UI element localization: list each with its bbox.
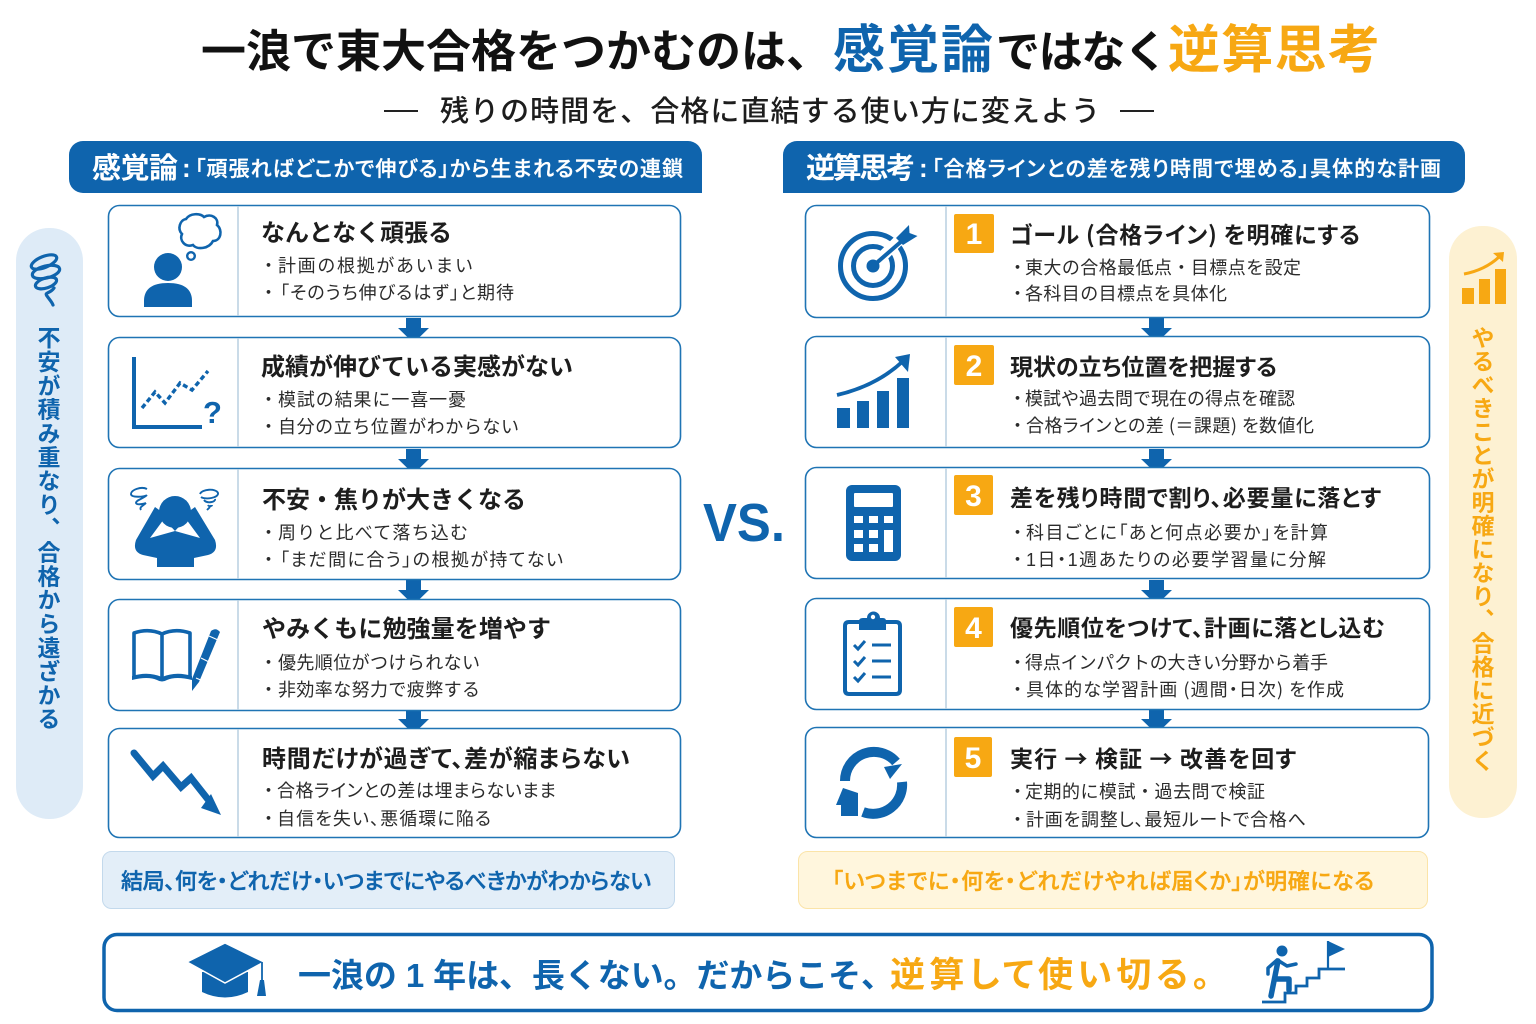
left header banner: 感覚論 <box>92 152 178 185</box>
card: step 1: ・ <box>1013 258 1022 278</box>
card: 成績が伸びている実感がない: 模試の結果に一喜一憂 <box>278 390 466 410</box>
card: なんとなく頑張る: 「そのうち伸びるはず」と期待 <box>280 283 514 303</box>
icon: spiral <box>29 252 61 305</box>
card: step 2: 現状の立ち位置を把握する <box>1010 354 1277 380</box>
icon: falling arrow <box>134 753 221 815</box>
badge 2: 2 <box>966 350 982 383</box>
icon: cycle arrows <box>836 752 902 816</box>
right side pill: やるべきことが明確になり、合格に近づく <box>1468 326 1494 772</box>
card: やみくもに勉強量を増やす: ・ <box>264 680 273 700</box>
card: やみくもに勉強量を増やす: 非効率な努力で疲弊する <box>278 680 480 700</box>
right arrows <box>1141 318 1172 734</box>
card: step 5 <box>806 728 1428 838</box>
right conclusion box: 「いつまでに・何を・どれだけやれば届くか」が明確になる <box>832 869 1374 894</box>
title: 逆算思考 <box>1168 22 1380 80</box>
bottom message banner: 逆算して使い切る。 <box>890 956 1210 995</box>
left conclusion box <box>102 852 674 908</box>
badge 3: 3 <box>965 480 982 513</box>
card: 時間だけが過ぎて、差が縮まらない: 合格ラインとの差は埋まらないまま <box>277 781 556 801</box>
card: step 1: 各科目の目標点を具体化 <box>1025 284 1227 304</box>
card: step 3: 差を残り時間で割り、必要量に落とす <box>1010 485 1381 511</box>
card: 成績が伸びている実感がない <box>108 338 680 448</box>
card: 時間だけが過ぎて、差が縮まらない: 自信を失い、悪循環に陥る <box>277 809 491 829</box>
right header banner: : <box>919 153 928 183</box>
left conclusion box: 結局、何を・どれだけ・いつまでにやるべきかがわからない <box>121 869 651 894</box>
icon: person thinking <box>144 214 220 307</box>
card: step 1: ・ <box>1013 284 1022 304</box>
icon: worried person <box>131 488 218 567</box>
title: 一浪で東大合格をつかむのは、 <box>201 26 831 77</box>
bottom message banner <box>104 934 1432 1010</box>
icon: uncertain chart: ? <box>203 395 222 430</box>
title: 感覚論 <box>833 22 993 80</box>
icon: climbing stairs to flag <box>1262 941 1345 1002</box>
badge 5 <box>954 737 992 777</box>
card: step 1: ゴール (合格ライン) を明確にする <box>1010 216 1360 250</box>
card: なんとなく頑張る <box>108 206 680 316</box>
card: なんとなく頑張る: なんとなく頑張る <box>261 220 452 247</box>
icon: growth chart <box>837 354 910 428</box>
card: step 5: 実行 → 検証 → 改善を回す <box>1010 740 1296 774</box>
card: step 2: ・ <box>1013 416 1022 436</box>
right header banner: 逆算思考 <box>806 152 915 185</box>
icon: graduation cap <box>187 943 266 998</box>
VS label: VS. <box>703 493 785 553</box>
left arrows <box>398 318 429 734</box>
card: 成績が伸びている実感がない: 成績が伸びている実感がない <box>261 353 573 381</box>
badge 1: 1 <box>966 218 982 251</box>
card: step 2: 合格ラインとの差 (＝課題) を数値化 <box>1026 412 1314 438</box>
left side pill <box>16 228 83 819</box>
card: step 5: 定期的に模試・過去問で検証 <box>1025 782 1265 802</box>
title <box>201 22 1380 80</box>
subtitle: 残りの時間を、合格に直結する使い方に変えよう <box>440 95 1100 128</box>
card: step 3: ・ <box>1013 523 1022 543</box>
card: なんとなく頑張る: ・ <box>264 256 273 276</box>
card: なんとなく頑張る: ・ <box>264 283 273 303</box>
card: 不安・焦りが大きくなる: ・ <box>264 550 273 570</box>
card: step 1 <box>806 206 1430 318</box>
card: step 4: 具体的な学習計画 (週間・日次) を作成 <box>1026 676 1344 702</box>
card: step 5: ・ <box>1013 810 1022 830</box>
card: step 2 <box>806 336 1430 448</box>
icon: calculator <box>846 485 901 561</box>
card: step 3 <box>806 468 1430 578</box>
card: 不安・焦りが大きくなる: 周りと比べて落ち込む <box>278 523 468 543</box>
card: やみくもに勉強量を増やす: ・ <box>264 653 273 673</box>
card: なんとなく頑張る: 計画の根拠があいまい <box>278 256 473 276</box>
card: step 5: 計画を調整し、最短ルートで合格へ <box>1026 810 1306 830</box>
left header banner: : <box>182 153 191 183</box>
left header banner: 「頑張ればどこかで伸びる」から生まれる不安の連鎖 <box>195 158 683 181</box>
card: やみくもに勉強量を増やす <box>108 600 680 710</box>
card: 時間だけが過ぎて、差が縮まらない: ・ <box>264 781 273 801</box>
card: 不安・焦りが大きくなる: 「まだ間に合う」の根拠が持てない <box>280 550 563 570</box>
badge 1 <box>954 214 994 253</box>
card: 成績が伸びている実感がない: ・ <box>264 390 273 410</box>
icon: rising bars <box>1462 252 1506 304</box>
title: ではなく <box>996 28 1168 77</box>
right header banner: 「合格ラインとの差を残り時間で埋める」具体的な計画 <box>932 158 1441 181</box>
card: step 3: ・ <box>1013 550 1022 570</box>
card: step 4 <box>806 598 1430 710</box>
badge 4: 4 <box>965 612 982 645</box>
card: step 2: ・ <box>1013 389 1022 409</box>
card: step 2: 模試や過去問で現在の得点を確認 <box>1025 389 1295 409</box>
card: やみくもに勉強量を増やす: 優先順位がつけられない <box>278 653 480 673</box>
card: 成績が伸びている実感がない: ・ <box>264 417 273 437</box>
icon: target <box>840 225 918 298</box>
bottom message banner: 一浪の 1 年は、長くない。だからこそ、 <box>298 957 894 994</box>
right conclusion box <box>798 852 1428 908</box>
badge 5: 5 <box>965 742 981 775</box>
card: 時間だけが過ぎて、差が縮まらない: 時間だけが過ぎて、差が縮まらない <box>262 745 630 773</box>
card: step 4: ・ <box>1013 680 1022 700</box>
card: step 5: ・ <box>1013 782 1022 802</box>
card: やみくもに勉強量を増やす: やみくもに勉強量を増やす <box>262 616 551 643</box>
card: step 3: 科目ごとに「あと何点必要か」を計算 <box>1026 523 1328 543</box>
card: step 3: 1日・1週あたりの必要学習量に分解 <box>1026 550 1326 570</box>
badge 3 <box>954 475 993 515</box>
card: 不安・焦りが大きくなる: 不安・焦りが大きくなる <box>262 486 526 514</box>
card: 不安・焦りが大きくなる: ・ <box>264 523 273 543</box>
card: step 4: 得点インパクトの大きい分野から着手 <box>1025 653 1328 673</box>
left side pill: 不安が積み重なり、合格から遠ざかる <box>34 326 60 730</box>
badge 2 <box>954 345 994 385</box>
right header banner <box>783 141 1465 193</box>
card: step 4: 優先順位をつけて、計画に落とし込む <box>1010 615 1385 641</box>
left header banner <box>69 141 702 193</box>
card: step 4: ・ <box>1013 653 1022 673</box>
card: 時間だけが過ぎて、差が縮まらない: ・ <box>264 809 273 829</box>
right side pill <box>1449 226 1517 818</box>
card: step 1: 東大の合格最低点・目標点を設定 <box>1025 258 1301 278</box>
icon: book and pen <box>132 629 220 691</box>
icon: uncertain chart <box>134 357 222 430</box>
icon: clipboard checklist <box>845 612 900 694</box>
badge 4 <box>954 607 993 647</box>
card: 時間だけが過ぎて、差が縮まらない <box>108 728 680 838</box>
card: 成績が伸びている実感がない: 自分の立ち位置がわからない <box>278 417 519 437</box>
card: 不安・焦りが大きくなる <box>108 468 680 580</box>
